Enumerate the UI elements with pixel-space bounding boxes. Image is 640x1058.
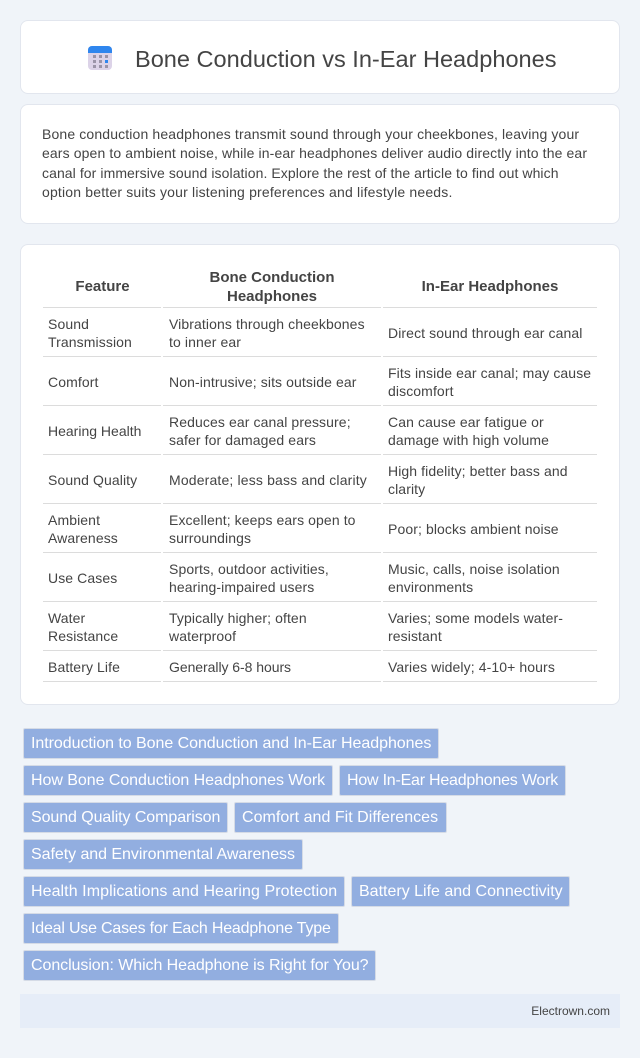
tag — [23, 765, 333, 796]
row: Sound Transmission: Transmission — [48, 334, 132, 350]
row: Sound Transmission: Vibrations through cheekbones — [169, 316, 365, 332]
footer — [20, 994, 620, 1028]
tag — [23, 950, 376, 981]
tag: How Bone Conduction Headphones Work — [31, 772, 325, 789]
intro panel — [20, 104, 620, 224]
row: Use Cases: Sports, outdoor activities, — [169, 561, 329, 577]
row: Use Cases: Use Cases — [48, 570, 117, 586]
row: Ambient Awareness: Awareness — [48, 530, 118, 546]
row: Sound Quality: Moderate; less bass and clarity — [169, 472, 367, 488]
intro text: option better suits your listening preferences and lifestyle needs. — [42, 184, 453, 200]
tag — [339, 765, 566, 796]
row: Hearing Health: Hearing Health — [48, 423, 141, 439]
row: Hearing Health: Can cause ear fatigue or — [388, 414, 544, 430]
intro text: ears open to ambient noise, while in-ear headphones deliver audio directly into the ear — [42, 145, 587, 161]
tag — [351, 876, 570, 907]
tag: Sound Quality Comparison — [31, 809, 220, 826]
table header: In-Ear Headphones — [422, 278, 558, 295]
row: Use Cases: environments — [388, 579, 473, 595]
intro text: Bone conduction headphones transmit sound through your cheekbones, leaving your — [42, 126, 579, 142]
intro text — [42, 126, 587, 200]
row: Comfort: Comfort — [48, 374, 98, 390]
row: Battery Life: Battery Life — [48, 659, 120, 675]
intro text: canal for immersive sound isolation. Explore the rest of the article to find out which — [42, 165, 559, 181]
table header: Feature — [75, 278, 130, 295]
row: Comfort: discomfort — [388, 383, 454, 399]
tag: Health Implications and Hearing Protection — [31, 883, 337, 900]
row: Hearing Health — [48, 414, 549, 448]
row: Battery Life — [48, 659, 555, 675]
row: Ambient Awareness: Excellent; keeps ears open to — [169, 512, 356, 528]
row: Battery Life: Varies widely; 4-10+ hours — [388, 659, 555, 675]
row: Comfort: Fits inside ear canal; may cause — [388, 365, 591, 381]
row: Water Resistance: Varies; some models water- — [388, 610, 563, 626]
row: Ambient Awareness: Poor; blocks ambient noise — [388, 521, 559, 537]
row: Sound Quality: Sound Quality — [48, 472, 137, 488]
row: Water Resistance: resistant — [388, 628, 442, 644]
panel: comparison table — [20, 244, 620, 705]
title: Bone Conduction vs In-Ear Headphones — [135, 46, 556, 72]
tag: Conclusion: Which Headphone is Right for You? — [31, 957, 369, 974]
table header: Headphones — [227, 288, 317, 305]
tag: Introduction to Bone Conduction and In-Ear Headphones — [31, 735, 431, 752]
row: Ambient Awareness — [48, 512, 559, 546]
row: Hearing Health: safer for damaged ears — [169, 432, 316, 448]
row: Use Cases — [48, 561, 560, 595]
footer credit: Electrown.com — [531, 1004, 610, 1018]
row: Ambient Awareness: Ambient — [48, 512, 100, 528]
table header: Bone Conduction — [210, 269, 334, 286]
row: Sound Transmission — [48, 316, 582, 350]
row: Sound Quality: High fidelity; better bass and — [388, 463, 568, 479]
row: Ambient Awareness: surroundings — [169, 530, 251, 546]
row: Hearing Health: Reduces ear canal pressure; — [169, 414, 351, 430]
tag: Safety and Environmental Awareness — [31, 846, 295, 863]
tag: Battery Life and Connectivity — [359, 883, 563, 900]
row: Water Resistance: Typically higher; often — [169, 610, 307, 626]
row: Use Cases: Music, calls, noise isolation — [388, 561, 560, 577]
row: Water Resistance: Water — [48, 610, 85, 626]
panel: topic links — [23, 728, 570, 981]
row: Water Resistance — [48, 610, 563, 644]
row: Sound Transmission: Direct sound through ear canal — [388, 325, 582, 341]
row: Comfort: Non-intrusive; sits outside ear — [169, 374, 357, 390]
row: Hearing Health: damage with high volume — [388, 432, 549, 448]
tag — [23, 728, 439, 759]
table header — [75, 269, 558, 305]
row: Sound Transmission: to inner ear — [169, 334, 241, 350]
tag: Comfort and Fit Differences — [242, 809, 438, 826]
tag: Ideal Use Cases for Each Headphone Type — [31, 920, 331, 937]
row: Use Cases: hearing-impaired users — [169, 579, 314, 595]
row: Sound Quality — [48, 463, 568, 497]
row: Sound Quality: clarity — [388, 481, 425, 497]
row: Battery Life: Generally 6-8 hours — [169, 659, 291, 675]
row: Water Resistance: Resistance — [48, 628, 118, 644]
tag: How In-Ear Headphones Work — [347, 772, 558, 789]
header panel — [20, 20, 620, 94]
tag — [23, 913, 339, 944]
tag — [234, 802, 447, 833]
tag — [23, 839, 303, 870]
row: Comfort — [48, 365, 591, 399]
icon: calendar grid — [88, 46, 112, 70]
row: Water Resistance: waterproof — [169, 628, 236, 644]
row: Sound Transmission: Sound — [48, 316, 89, 332]
tag — [23, 802, 228, 833]
tag — [23, 876, 345, 907]
